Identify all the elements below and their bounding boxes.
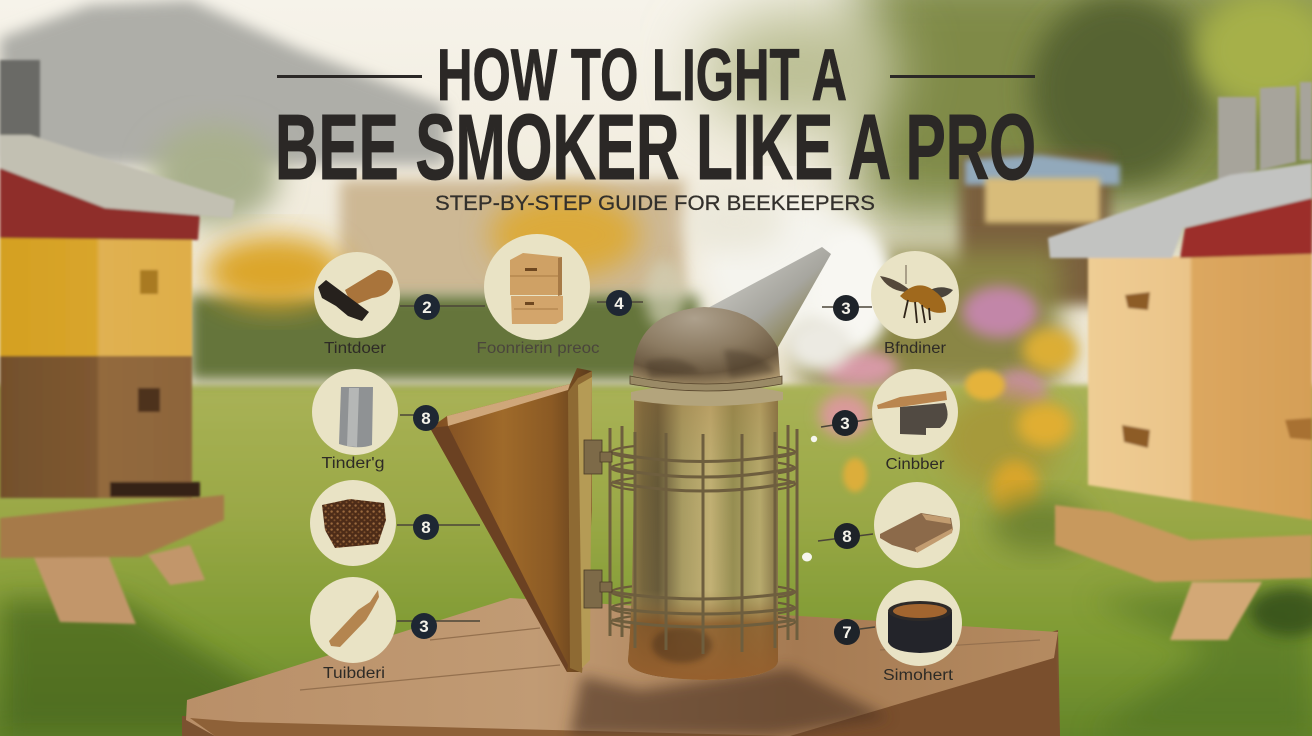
ingredient: charcoal block	[872, 369, 958, 473]
charcoal icon	[318, 280, 369, 321]
ingredient: foundation proof	[476, 234, 600, 357]
icon circle	[874, 482, 960, 568]
number badge 4: 4	[614, 294, 624, 313]
bellows front board	[568, 371, 592, 673]
icon circle	[310, 480, 396, 566]
label: Simohert	[883, 667, 954, 684]
ingredient: wood stick	[310, 577, 396, 682]
title line 1: HOW TO LIGHT A	[437, 35, 847, 116]
icon circle	[310, 577, 396, 663]
hive lower box	[0, 348, 192, 498]
ingredient: wood strips	[874, 482, 960, 568]
block on board icon	[877, 391, 948, 435]
number badge 3 left: 3	[419, 617, 429, 636]
wood stick icon	[329, 590, 379, 647]
label: Cinbber	[886, 456, 944, 473]
smoker dome	[633, 307, 780, 384]
label: Foonrierin preoc	[476, 340, 600, 357]
label: Tuibderi	[323, 665, 385, 682]
label: Tinder'g	[322, 455, 384, 472]
hive lower box	[1088, 365, 1312, 520]
hive legs	[1170, 582, 1262, 640]
icon circle	[312, 369, 398, 455]
ingredient: bee	[871, 251, 959, 357]
number badge 3 upper right	[833, 295, 859, 321]
number badge 3 upper right: 3	[841, 299, 851, 318]
left beehive	[0, 60, 235, 624]
hive base	[1055, 505, 1312, 582]
wooden hive icon	[510, 253, 563, 324]
hive red band	[0, 165, 200, 240]
label: Tintdoer	[324, 340, 386, 357]
icon circle	[871, 251, 959, 339]
granule pile icon	[322, 499, 386, 548]
bee icon	[880, 265, 953, 323]
hive roof	[1048, 163, 1312, 258]
spout	[706, 247, 831, 349]
hive upper box	[1088, 254, 1312, 378]
table top	[186, 598, 1058, 736]
smoker shadow	[570, 668, 890, 736]
hive legs	[33, 545, 205, 624]
wood strips icon	[880, 513, 953, 552]
number badge 8 right: 8	[842, 527, 852, 546]
title rule left	[277, 75, 422, 78]
bellows panel	[430, 368, 592, 672]
cage bars and front rings	[610, 425, 797, 654]
black pot icon	[888, 601, 952, 653]
wood chunk icon	[345, 270, 393, 306]
icon circle	[484, 234, 590, 340]
title rule right	[890, 75, 1035, 78]
hinges	[584, 440, 612, 608]
subtitle: STEP-BY-STEP GUIDE FOR BEEKEEPERS	[435, 192, 875, 215]
icon circle	[872, 369, 958, 455]
number badge 7: 7	[842, 623, 852, 642]
wooden table	[182, 598, 1060, 736]
number badge 2: 2	[422, 298, 432, 317]
hive roof	[0, 135, 235, 218]
smoke plume	[645, 192, 892, 371]
lower rim	[631, 384, 783, 406]
upper rim	[630, 376, 782, 391]
hive chimney	[0, 60, 40, 138]
hive chimneys	[1218, 82, 1312, 180]
number badge 3 middle right: 3	[840, 414, 850, 433]
number badge 7	[834, 619, 860, 645]
icon circle	[876, 580, 962, 666]
number badge 3 middle right	[832, 410, 858, 436]
number badge 8 upper left	[413, 405, 439, 431]
number badge 2	[414, 294, 440, 320]
number badge 4	[606, 290, 632, 316]
title block	[275, 35, 1036, 215]
bee smoker	[430, 247, 831, 680]
water droplets	[802, 436, 817, 562]
table front and side	[182, 630, 1060, 736]
smoker body	[628, 398, 778, 680]
connector lines	[397, 302, 875, 629]
number badge 8 right	[834, 523, 860, 549]
number badge 3 left	[411, 613, 437, 639]
number badge 8 upper left: 8	[421, 409, 431, 428]
number badge 8 lower left: 8	[421, 518, 431, 537]
hive red band	[1180, 198, 1312, 258]
ingredient: granules	[310, 480, 396, 566]
right beehive	[1048, 82, 1312, 640]
cage back rings	[611, 443, 795, 631]
hive upper box	[0, 238, 192, 356]
icon circle	[314, 252, 400, 338]
ingredient: tinder	[314, 252, 400, 357]
hive base	[0, 495, 224, 558]
number badge 8 lower left	[413, 514, 439, 540]
metal can icon	[339, 387, 373, 447]
label: Bfndiner	[884, 340, 946, 357]
ingredient: tinder can	[312, 369, 398, 472]
ingredient: black pot	[876, 580, 962, 684]
